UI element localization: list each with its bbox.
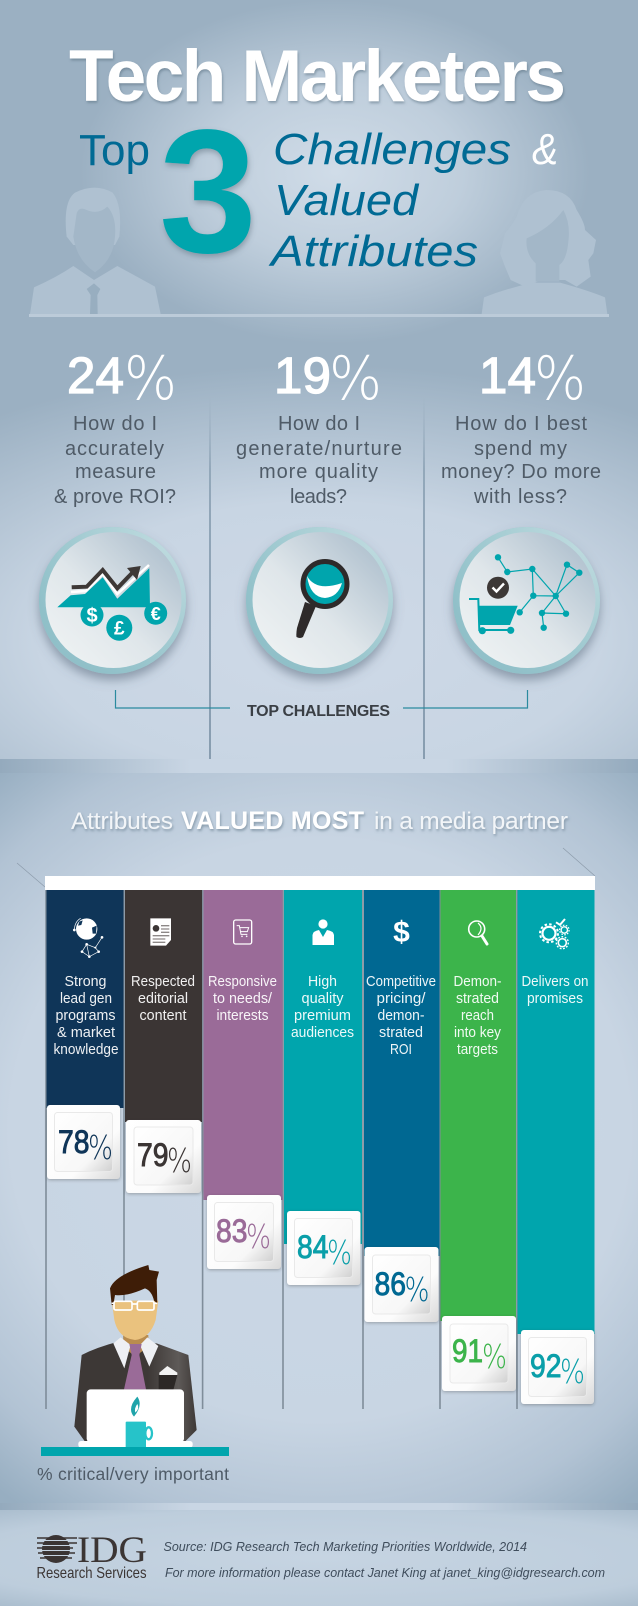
panel: challenge 19% <box>236 344 402 674</box>
stat: 19%: 19 <box>274 347 331 404</box>
text: respected editorial label: Respected <box>131 974 195 990</box>
text: competitive label: strated <box>379 1025 423 1041</box>
text: strong lead gen label <box>54 974 118 1058</box>
panel: challenge 14% <box>441 344 601 674</box>
card: 78%: % <box>88 1128 113 1167</box>
text: demonstrated label <box>454 974 502 1058</box>
icon: man silhouette <box>30 188 161 314</box>
text: demonstrated label: Demon- <box>454 974 502 990</box>
text: respected editorial label <box>131 974 195 1024</box>
text: competitive label: ROI <box>390 1042 412 1058</box>
text: source and contact: Source: IDG Research Tech Marketing Priorities Worldwide, 2014 <box>164 1540 527 1554</box>
card: 91% <box>442 1316 516 1391</box>
card: 83%: % <box>246 1217 271 1256</box>
text: demonstrated label: targets <box>457 1042 498 1058</box>
text: question 2: How do I <box>278 413 360 435</box>
text: question 1 <box>54 413 176 508</box>
card: 86%: % <box>404 1270 430 1309</box>
illustration: man at laptop <box>41 1265 229 1456</box>
logo: IDG Research Services <box>36 1530 147 1582</box>
card: 84%: 84 <box>297 1229 328 1265</box>
stat: 24%: % <box>124 344 177 414</box>
logo: IDG Research Services: IDG <box>77 1530 147 1571</box>
card: 83% <box>207 1195 281 1269</box>
text: question 2: leads? <box>290 486 347 508</box>
stat: 14%: % <box>534 344 586 414</box>
text: responsive label <box>208 974 277 1024</box>
text: responsive label: to needs/ <box>213 991 273 1007</box>
text: question 3: spend my <box>474 438 567 460</box>
icon: gears <box>540 919 569 949</box>
stat: 19% <box>274 344 382 414</box>
icon: chart and currency disc: $ <box>86 605 98 627</box>
heading: Challenges & Valued Attributes: Valued <box>274 176 420 225</box>
text: question 3: with less? <box>473 486 567 508</box>
big number 3: 3 <box>159 94 257 290</box>
heading: Attributes valued most <box>71 807 568 835</box>
card: 91%: % <box>482 1337 507 1376</box>
heading: Attributes valued most: Attributes <box>71 808 173 835</box>
text: high quality label: audiences <box>291 1025 354 1041</box>
bar: delivers on promises <box>518 890 594 1334</box>
card: 86% <box>364 1247 438 1322</box>
heading: Attributes valued most: VALUED MOST <box>181 807 364 835</box>
label: TOP CHALLENGES with bracket <box>116 690 528 720</box>
bar: responsive to needs <box>204 890 282 1200</box>
heading: Challenges & Valued Attributes: Attributes <box>268 227 478 276</box>
card: 83%: 83 <box>216 1213 248 1249</box>
card: 92% <box>521 1330 594 1404</box>
text: demonstrated label: reach <box>461 1008 494 1024</box>
text: strong lead gen label: Strong <box>64 974 106 990</box>
icon: globe network <box>73 918 103 958</box>
icon: newspaper <box>150 918 171 946</box>
icon: dollar: $ <box>393 916 410 949</box>
bar: competitive pricing <box>364 890 440 1256</box>
text: responsive label: Responsive <box>208 974 277 990</box>
card: 79% <box>126 1120 201 1193</box>
card: 79%: % <box>167 1141 192 1180</box>
panel: challenge 24% <box>39 344 186 674</box>
text: high quality label: quality <box>302 991 344 1007</box>
icon: tablet cart <box>234 920 252 944</box>
text: question 3 <box>441 413 601 508</box>
bar: respected editorial <box>125 890 202 1122</box>
text: question 2 <box>236 413 402 508</box>
text: strong lead gen label: knowledge <box>54 1042 118 1058</box>
text: question 1: & prove ROI? <box>54 486 176 508</box>
heading: Challenges & Valued Attributes: Challenges <box>273 125 511 174</box>
heading: Attributes valued most: in a media partner <box>374 808 568 835</box>
heading: Challenges & Valued Attributes: & <box>532 125 558 174</box>
card: 79%: 79 <box>137 1137 168 1173</box>
stat: 24% <box>67 344 177 414</box>
stat: 14%: 14 <box>479 347 536 404</box>
text: high quality label <box>291 974 354 1041</box>
text: question 2: more quality <box>259 461 378 483</box>
chart: attributes bars <box>17 848 595 1409</box>
text: delivers label: Delivers on <box>522 974 588 990</box>
label: TOP CHALLENGES with bracket: TOP CHALLENGES <box>247 703 390 720</box>
icon: woman silhouette <box>482 190 607 314</box>
icon: chart and currency disc: € <box>151 604 161 624</box>
icon: chart and currency disc <box>39 527 186 674</box>
caption: % critical/very important: % critical/very important <box>37 1464 229 1484</box>
card: 86%: 86 <box>374 1266 406 1302</box>
card: 92%: 92 <box>530 1348 562 1384</box>
text: high quality label: High <box>308 974 337 990</box>
text: competitive label: Competitive <box>366 974 436 990</box>
text: competitive label <box>366 974 436 1058</box>
heading: Challenges & Valued Attributes <box>268 125 558 276</box>
card: 78%: 78 <box>58 1124 90 1160</box>
icon: magnifier small <box>469 921 487 944</box>
text: respected editorial label: content <box>140 1008 186 1024</box>
icon: person <box>312 919 334 945</box>
title: Tech Marketers: Tech Marketers <box>69 36 566 117</box>
bar: demonstrated reach <box>440 890 516 1321</box>
text: strong lead gen label: lead gen <box>60 991 112 1007</box>
stat: 24%: 24 <box>67 347 124 404</box>
icon: cart and network disc <box>453 527 600 674</box>
text: respected editorial label: editorial <box>138 991 188 1007</box>
text: question 1: measure <box>75 461 156 483</box>
text: question 2: generate/nurture <box>236 438 402 460</box>
heading: Top: Top <box>79 126 150 175</box>
text: question 3: money? Do more <box>441 461 601 483</box>
text: question 3: How do I best <box>455 413 587 435</box>
bar: strong lead gen <box>46 890 124 1108</box>
text: responsive label: interests <box>216 1008 268 1024</box>
icon: magnifier disc <box>246 527 393 674</box>
stat: 19%: % <box>329 344 382 414</box>
text: question 1: accurately <box>65 438 164 460</box>
text: delivers label: promises <box>527 991 583 1007</box>
text: strong lead gen label: & market <box>57 1025 115 1041</box>
text: question 1: How do I <box>73 413 157 435</box>
text: competitive label: demon- <box>378 1008 425 1024</box>
text: source and contact: For more information please contact Janet King at janet_king@idgresearch.com <box>165 1566 605 1580</box>
text: delivers label <box>522 974 588 1007</box>
text: demonstrated label: strated <box>456 991 499 1007</box>
card: 84% <box>287 1211 360 1285</box>
bar: high quality audiences <box>284 890 362 1244</box>
stat: 14% <box>479 344 586 414</box>
text: high quality label: premium <box>294 1008 351 1024</box>
card: 91%: 91 <box>452 1333 483 1369</box>
logo: IDG Research Services: Research Services <box>36 1565 146 1582</box>
icon: chart and currency disc: £ <box>114 618 125 640</box>
card: 84%: % <box>327 1233 352 1272</box>
card: 92%: % <box>560 1352 585 1391</box>
card: 78% <box>47 1105 120 1179</box>
text: source and contact <box>164 1540 605 1580</box>
text: demonstrated label: into key <box>454 1025 502 1041</box>
text: competitive label: pricing/ <box>376 991 427 1007</box>
text: strong lead gen label: programs <box>56 1008 116 1024</box>
